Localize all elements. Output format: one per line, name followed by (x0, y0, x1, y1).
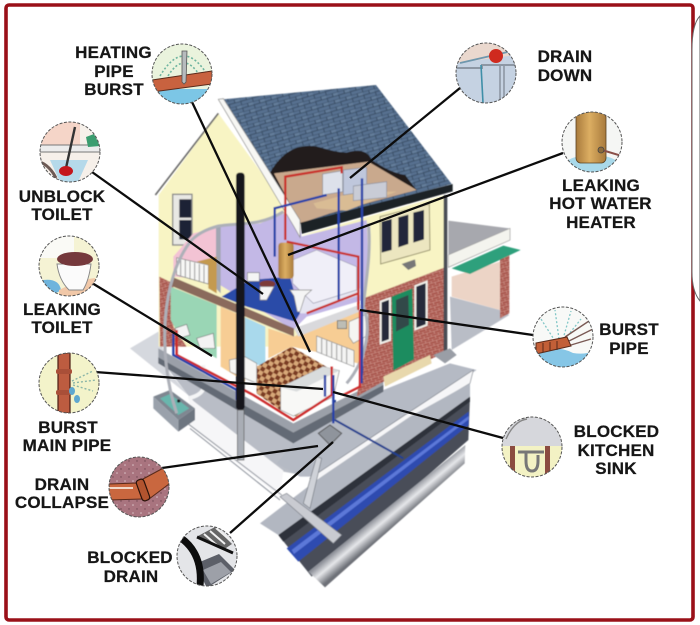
label: leaking toilet: LEAKING (23, 300, 101, 319)
label: burst pipe: PIPE (609, 339, 649, 358)
left yard (130, 332, 190, 397)
floor slab brick (172, 277, 294, 337)
leader: drain down (350, 88, 460, 178)
leader: heating pipe burst (192, 102, 310, 352)
garage floor (450, 297, 509, 350)
green room wall (171, 287, 217, 358)
fascia board (218, 99, 300, 237)
label: burst pipe: BURST (599, 320, 659, 339)
garage brick pier (500, 253, 509, 318)
label: blocked kitchen sink: BLOCKED (574, 422, 659, 441)
cold water tanks (323, 167, 387, 201)
right edge card (692, 16, 700, 301)
label: drain down: DOWN (538, 66, 592, 85)
bathroom floor light (298, 288, 360, 313)
peach wall centre (268, 308, 363, 365)
garage wall (452, 262, 500, 310)
front paving (277, 363, 477, 477)
attic floor (313, 192, 397, 211)
front wall (297, 195, 445, 300)
riser drain (303, 457, 322, 508)
brick wall (357, 267, 447, 397)
kitchen unit (281, 367, 339, 416)
pink room wall (173, 227, 217, 280)
security light (402, 259, 416, 270)
cut edge curve (165, 212, 369, 413)
red heating pipes (177, 310, 360, 420)
leader lines (92, 88, 563, 533)
label: blocked kitchen sink: KITCHEN (578, 441, 654, 460)
icon: drain collapse (109, 457, 169, 517)
leader: burst pipe (360, 310, 533, 335)
roof hole (270, 146, 417, 223)
ground and street section (130, 332, 477, 587)
lower paving (260, 383, 470, 535)
leader: drain collapse (162, 446, 318, 468)
blue bathroom floor (222, 277, 300, 322)
leader: blocked drain (230, 442, 333, 533)
upper windows right (380, 204, 430, 264)
door side windows (381, 282, 427, 343)
label: leaking hot water heater: HOT WATER (549, 194, 652, 213)
kitchen and plumbing (173, 310, 362, 423)
gable edge (155, 113, 218, 195)
septic drain line (187, 423, 282, 500)
floor slab grey (294, 303, 363, 337)
garage (448, 221, 521, 350)
light blue room (245, 317, 265, 368)
label: drain collapse: COLLAPSE (15, 493, 109, 512)
label: burst main pipe: BURST (38, 418, 98, 437)
house illustration (130, 85, 521, 587)
plinth side (158, 357, 383, 443)
checkered floor (257, 347, 337, 417)
label: unblock toilet: UNBLOCK (19, 187, 106, 206)
label: blocked drain: DRAIN (104, 567, 158, 586)
icon: burst pipe (533, 307, 593, 367)
lower bath unit (229, 357, 257, 383)
label: unblock toilet: TOILET (31, 205, 93, 224)
left path (187, 398, 283, 497)
basin (290, 290, 312, 312)
blue water main (287, 412, 469, 562)
lower left brick (159, 277, 187, 347)
label: burst pipe (599, 320, 659, 358)
attic lining (274, 162, 417, 223)
label: heating pipe burst (75, 43, 152, 99)
hot water cylinder (278, 243, 294, 279)
right downpipe (444, 195, 447, 353)
gable wall (159, 113, 298, 347)
main soil pipe (236, 173, 245, 460)
cutaway interior (165, 208, 369, 413)
water service line (335, 400, 403, 458)
lower sinks (175, 324, 215, 348)
plinth (158, 348, 383, 443)
leader: burst main pipe (95, 372, 323, 389)
label: drain down (538, 47, 592, 85)
left paving (158, 357, 302, 475)
icon: leaking toilet (39, 236, 99, 296)
manhole (318, 425, 342, 445)
label: leaking hot water heater (549, 176, 652, 232)
septic box (153, 390, 195, 432)
peach lower walls (221, 307, 245, 382)
label: leaking toilet: TOILET (31, 318, 93, 337)
upper window left (173, 194, 192, 245)
pavement stripe (310, 370, 473, 482)
icon: heating pipe burst (152, 44, 212, 104)
radiator upstairs (177, 258, 208, 284)
label: leaking hot water heater: LEAKING (562, 176, 640, 195)
label: blocked kitchen sink (574, 422, 659, 478)
main house (155, 113, 457, 413)
label: burst main pipe (23, 418, 111, 455)
cutaway bathroom wall (218, 208, 368, 330)
leader: blocked kitchen sink (333, 392, 503, 438)
street trench (278, 397, 470, 577)
gutter (301, 184, 453, 234)
icon: burst main pipe (39, 353, 99, 413)
label: drain collapse: DRAIN (35, 475, 89, 494)
label: drain down: DRAIN (538, 47, 592, 66)
label: heating pipe burst: PIPE (94, 62, 134, 81)
pipe foot (433, 348, 457, 363)
sewer main (308, 445, 465, 587)
trench highlight (278, 397, 470, 542)
room divider (216, 226, 221, 293)
leader: leaking toilet (92, 283, 212, 356)
label: burst main pipe: MAIN PIPE (23, 436, 111, 455)
icon: unblock toilet (40, 122, 100, 182)
garage fascia (448, 228, 510, 267)
branch drain (280, 493, 342, 543)
icon: drain down (456, 43, 516, 103)
kitchen worktop (281, 367, 339, 392)
water main highlight (292, 416, 469, 554)
label: blocked drain: BLOCKED (87, 548, 173, 567)
blue cold pipes (173, 310, 362, 423)
leader: leaking hot water heater (288, 153, 563, 255)
boiler (349, 313, 368, 343)
upstairs toilet (247, 273, 275, 300)
roof space pipes (275, 167, 362, 373)
label: blocked kitchen sink: SINK (595, 459, 637, 478)
bath (293, 250, 357, 303)
wall control (337, 321, 347, 329)
green door (392, 288, 414, 371)
label: leaking hot water heater: HEATER (566, 213, 636, 232)
upper pipework and attic (218, 85, 453, 460)
label: blocked drain (87, 548, 173, 586)
label: drain collapse (15, 475, 109, 512)
label: unblock toilet (19, 187, 106, 224)
waste pipe (188, 365, 203, 398)
icon: blocked kitchen sink (502, 417, 562, 477)
wooden panel (197, 257, 217, 293)
label: heating pipe burst: HEATING (75, 43, 152, 62)
label: heating pipe burst: BURST (84, 80, 144, 99)
leader: unblock toilet (92, 172, 263, 294)
heated radiator downstairs (317, 336, 354, 367)
door step (383, 355, 432, 387)
icon: leaking hot water heater (562, 112, 622, 173)
green awning (452, 246, 521, 274)
garage roof (448, 221, 509, 255)
roof (223, 85, 452, 224)
label: leaking toilet (23, 300, 101, 337)
icon: blocked drain (177, 526, 237, 588)
